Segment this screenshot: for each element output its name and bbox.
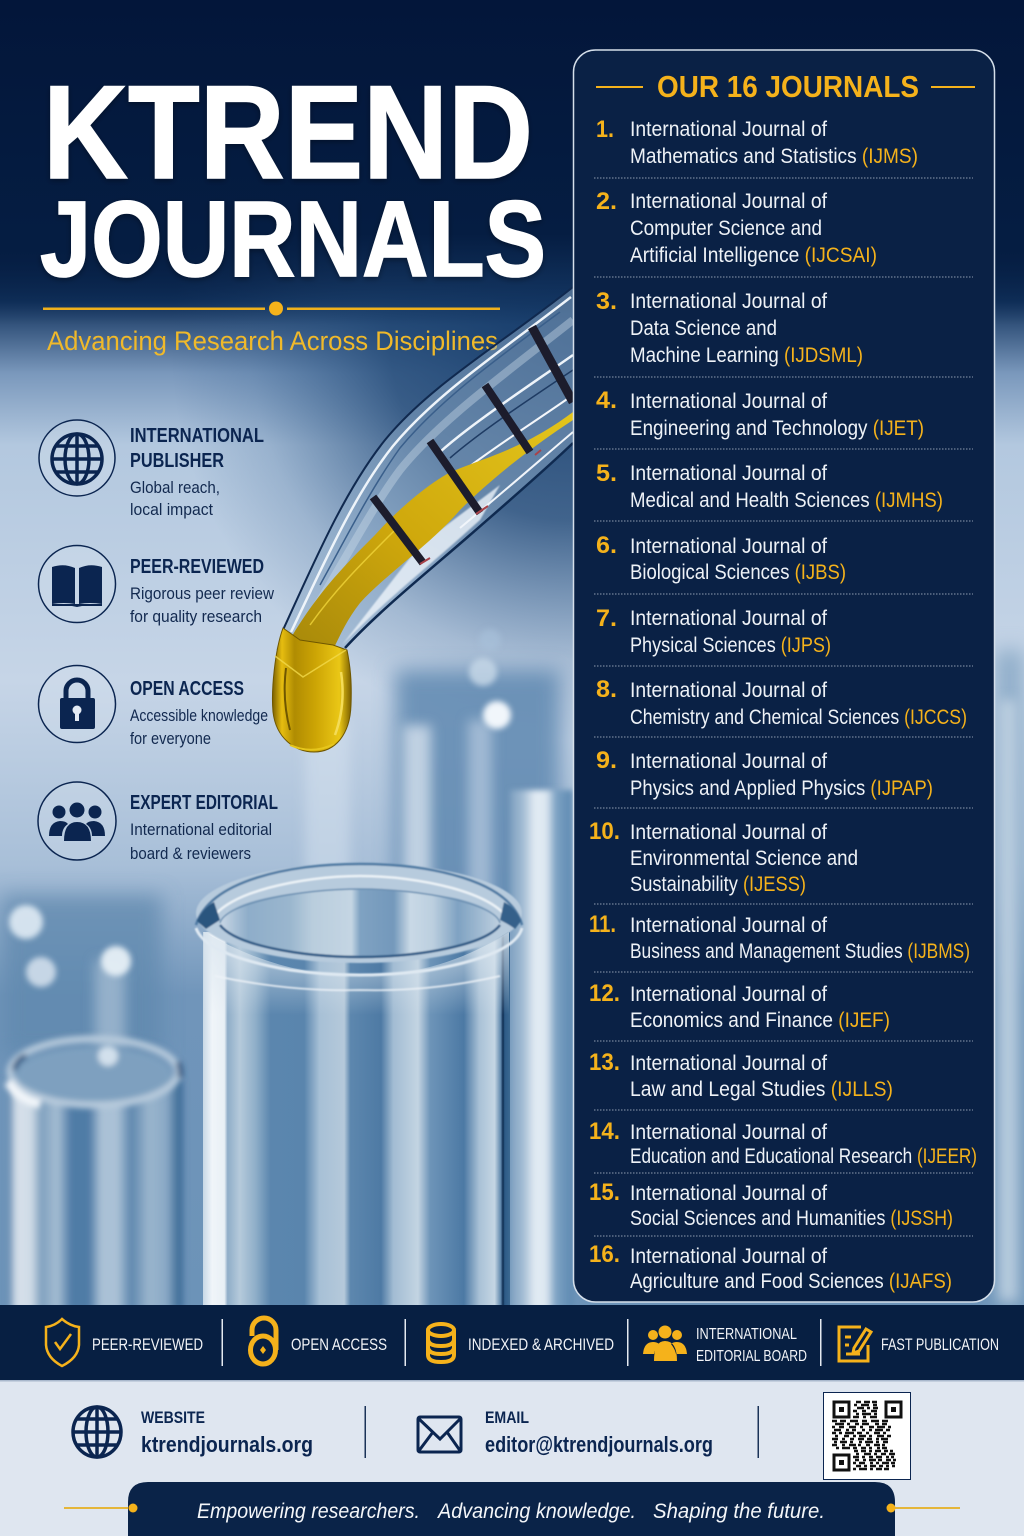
icon: database — [428, 1324, 454, 1362]
journal 14: International Journal of — [630, 1121, 827, 1144]
journal 8: 8. — [596, 676, 617, 703]
journal 7: International Journal of — [630, 607, 827, 630]
journal 6: Biological Sciences (IJBS) — [630, 561, 846, 584]
icon: envelope — [418, 1417, 461, 1452]
panel: our 16 journals — [574, 50, 994, 1302]
journal 5 — [596, 460, 943, 512]
feature: international publisher: local impact — [130, 500, 213, 519]
title: JOURNALS — [40, 178, 546, 299]
journal 2: Computer Science and — [630, 217, 822, 240]
feature: expert editorial — [38, 782, 278, 863]
feature: peer-reviewed: PEER-REVIEWED — [130, 556, 264, 578]
journal 1 — [596, 116, 918, 168]
journal 12: Economics and Finance (IJEF) — [630, 1009, 890, 1032]
journal 16: Agriculture and Food Sciences (IJAFS) — [630, 1270, 952, 1293]
title: KTREND — [43, 59, 533, 207]
journal 7 — [596, 605, 831, 657]
journal 3: Data Science and — [630, 317, 777, 340]
journal 10 — [589, 818, 858, 896]
website: WEBSITE — [141, 1408, 205, 1427]
email: EMAIL — [485, 1408, 529, 1427]
journal 2: International Journal of — [630, 190, 827, 213]
journal 4: Engineering and Technology (IJET) — [630, 417, 924, 440]
editorial board label — [696, 1326, 807, 1365]
tagline bar — [64, 1482, 960, 1536]
feature: peer-reviewed: Rigorous peer review — [130, 584, 275, 603]
journal 2: Artificial Intelligence (IJCSAI) — [630, 244, 877, 267]
email — [485, 1408, 713, 1457]
journal 4: 4. — [596, 387, 617, 414]
editorial board label: EDITORIAL BOARD — [696, 1348, 807, 1365]
journal 6: International Journal of — [630, 535, 827, 558]
journal 3: 3. — [596, 288, 617, 315]
journal 10: Environmental Science and — [630, 847, 858, 870]
journal 5: International Journal of — [630, 462, 827, 485]
feature: peer-reviewed: for quality research — [130, 607, 262, 626]
journal 5: Medical and Health Sciences (IJMHS) — [630, 489, 943, 512]
feature: expert editorial: International editorial — [130, 820, 272, 839]
feature: peer-reviewed — [38, 546, 275, 626]
journal 3 — [596, 288, 863, 367]
journal 11: Business and Management Studies (IJBMS) — [630, 940, 970, 963]
feature: open access — [38, 666, 268, 748]
title divider — [43, 302, 500, 316]
journal 3: International Journal of — [630, 290, 827, 313]
journal 4 — [596, 387, 924, 440]
journal 1: Mathematics and Statistics (IJMS) — [630, 145, 918, 168]
feature: international publisher: PUBLISHER — [130, 450, 224, 472]
website — [141, 1408, 313, 1457]
journal 9: International Journal of — [630, 750, 827, 773]
journal 3: Machine Learning (IJDSML) — [630, 344, 863, 367]
pipette with oil — [276, 287, 573, 660]
indexed label: INDEXED & ARCHIVED — [468, 1335, 614, 1354]
journal 14: 14. — [589, 1118, 620, 1145]
journal 12 — [589, 980, 890, 1032]
journal 6 — [596, 532, 846, 584]
journal 16: 16. — [589, 1241, 620, 1268]
tagline bar: Shaping the future. — [653, 1500, 825, 1523]
journal 4: International Journal of — [630, 390, 827, 413]
icon: shield — [46, 1319, 79, 1366]
tagline bar: Advancing knowledge. — [436, 1500, 636, 1523]
features list — [38, 420, 278, 863]
journal 2: 2. — [596, 188, 617, 215]
peer-reviewed label: PEER-REVIEWED — [92, 1335, 203, 1354]
journal 13 — [589, 1049, 893, 1101]
journal 7: Physical Sciences (IJPS) — [630, 634, 831, 657]
icon: open access — [250, 1318, 276, 1364]
QR code — [824, 1392, 910, 1480]
small test tube at left — [8, 1039, 184, 1310]
feature: open access: for everyone — [130, 729, 211, 748]
icon: globe — [73, 1407, 121, 1457]
journal 11: International Journal of — [630, 914, 827, 937]
journal 11: 11. — [589, 911, 616, 938]
feature: international publisher: Global reach, — [130, 478, 220, 497]
feature: expert editorial: EXPERT EDITORIAL — [130, 792, 278, 814]
journal 14: Education and Educational Research (IJEER) — [630, 1145, 977, 1168]
journal 13: 13. — [589, 1049, 620, 1076]
icon: people — [643, 1326, 687, 1361]
journal 9 — [596, 747, 933, 800]
journal 7: 7. — [596, 605, 617, 632]
feature: international publisher: INTERNATIONAL — [130, 425, 264, 447]
journal 15: International Journal of — [630, 1182, 827, 1205]
journal 5: 5. — [596, 460, 617, 487]
feature: open access: OPEN ACCESS — [130, 678, 244, 700]
journal 8: International Journal of — [630, 679, 827, 702]
journal 13: Law and Legal Studies (IJLLS) — [630, 1078, 893, 1101]
journal 15: 15. — [589, 1179, 620, 1206]
feature: open access: Accessible knowledge — [130, 706, 268, 725]
journal 10: 10. — [589, 818, 620, 845]
journal 9: Physics and Applied Physics (IJPAP) — [630, 777, 933, 800]
contact footer — [0, 1380, 1024, 1536]
journal 9: 9. — [596, 747, 617, 774]
journal 2 — [596, 188, 877, 267]
journal 15 — [589, 1179, 953, 1230]
blurred background tubes — [2, 629, 1024, 1310]
journal 1: 1. — [596, 116, 614, 143]
editorial board label: INTERNATIONAL — [696, 1326, 797, 1343]
journal 13: International Journal of — [630, 1052, 827, 1075]
tagline bar: Empowering researchers. — [197, 1500, 420, 1523]
email: editor@ktrendjournals.org — [485, 1432, 713, 1457]
subtitle: Advancing Research Across Disciplines — [47, 326, 498, 356]
journal 8: Chemistry and Chemical Sciences (IJCCS) — [630, 706, 967, 729]
feature: international publisher — [39, 420, 264, 519]
website: ktrendjournals.org — [141, 1432, 313, 1457]
journal 16 — [589, 1241, 952, 1293]
icon: fast publication — [839, 1327, 871, 1361]
journal 11 — [589, 911, 970, 963]
journal 12: International Journal of — [630, 983, 827, 1006]
journal 16: International Journal of — [630, 1245, 827, 1268]
benefits bar — [0, 1305, 1024, 1381]
oil drop — [272, 628, 351, 752]
feature: expert editorial: board & reviewers — [130, 844, 251, 863]
journal 6: 6. — [596, 532, 617, 559]
panel heading: OUR 16 JOURNALS — [657, 69, 919, 104]
journal 12: 12. — [589, 980, 620, 1007]
journal 14 — [589, 1118, 977, 1168]
open access label: OPEN ACCESS — [291, 1335, 387, 1354]
title — [40, 59, 546, 299]
journal 1: International Journal of — [630, 118, 827, 141]
journal 10: Sustainability (IJESS) — [630, 873, 806, 896]
journal 15: Social Sciences and Humanities (IJSSH) — [630, 1207, 953, 1230]
journal 10: International Journal of — [630, 821, 827, 844]
journal 8 — [596, 676, 967, 729]
large glass beaker — [196, 863, 522, 1310]
